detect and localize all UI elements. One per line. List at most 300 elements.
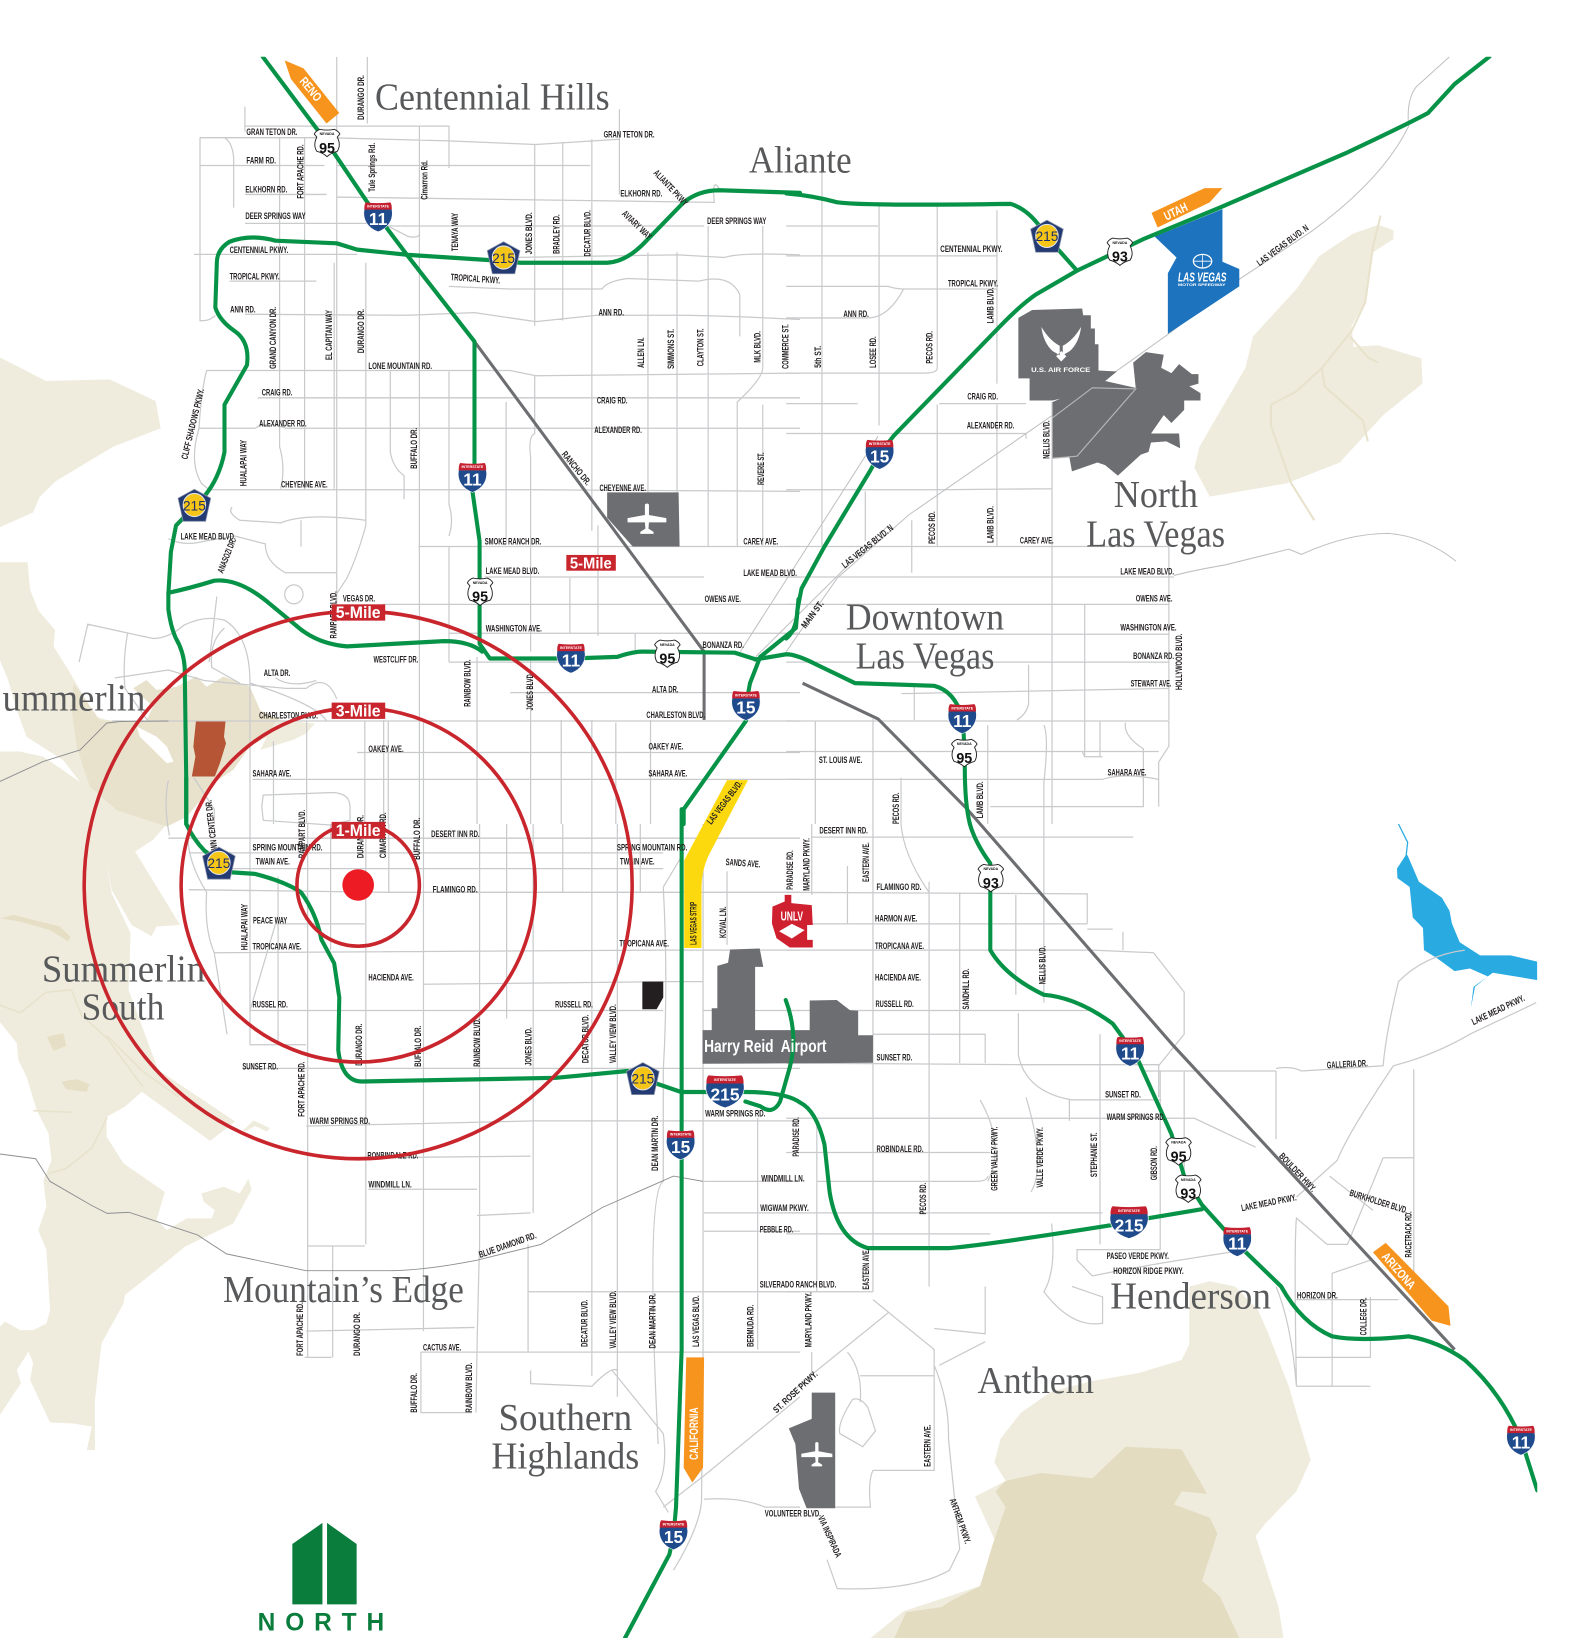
Harry Reid Airport: [703, 948, 873, 1064]
road labels: northwest quadrant: HUALAPAI WAY: [239, 439, 248, 486]
road labels: northeast quadrant: CENTENNIAL PKWY.: [940, 244, 1003, 254]
road labels: northwest quadrant: CHEYENNE AVE.: [281, 480, 328, 490]
road labels: southeast quadrant: FLAMINGO RD.: [877, 882, 921, 892]
road labels: northwest quadrant: MLK BLVD.: [753, 331, 763, 363]
shield: US 95: 95: [956, 751, 972, 767]
road labels: northwest quadrant: SIMMONS ST.: [666, 329, 676, 369]
road labels: northwest quadrant: CRAIG RD.: [262, 388, 292, 398]
road labels: southeast quadrant: HARMON AVE.: [875, 914, 917, 924]
directional arrow: Reno: RENO: [297, 74, 325, 105]
road labels: northwest quadrant: AVIARY WAY: [620, 208, 654, 242]
road labels: northeast quadrant: BONANZA RD.: [1133, 651, 1174, 661]
road labels: northwest quadrant: ANASOZI DR.: [216, 537, 238, 575]
shield: I-11: [948, 704, 976, 734]
road labels: southwest quadrant: TROPICANA AVE.: [253, 941, 302, 952]
shield: I-11: [1223, 1227, 1251, 1256]
shield: US 93: [978, 864, 1004, 892]
road labels: southwest quadrant: SANDS AVE.: [725, 857, 761, 870]
road labels: northwest quadrant: GRAND CANYON DR.: [268, 307, 278, 369]
road labels: northeast quadrant: WASHINGTON AVE.: [1120, 622, 1177, 633]
road labels: southeast quadrant: EASTERN AVE.: [861, 842, 871, 882]
shield: I-15: [865, 440, 894, 469]
road labels: southwest quadrant: HACIENDA AVE.: [368, 972, 414, 983]
shield: I-11: 11: [463, 469, 482, 490]
shield: CC 215: [203, 847, 235, 879]
road labels: southwest quadrant: DEAN MARTIN DR.: [648, 1293, 658, 1348]
road labels: northeast quadrant: LOSEE RD.: [868, 336, 878, 368]
road labels: northwest quadrant: CHARLESTON BLVD.: [259, 710, 318, 720]
shield: US 95: 95: [319, 141, 335, 157]
shield: I-11: INTERSTATE: [1510, 1428, 1532, 1432]
road labels: northwest quadrant: OAKEY AVE.: [368, 744, 404, 754]
road labels: northeast quadrant: LAS VEGAS BLVD. N: [840, 523, 895, 570]
road labels: northeast quadrant: HOLLYWOOD BLVD.: [1174, 634, 1184, 690]
road labels: northeast quadrant: ANN RD.: [843, 309, 869, 319]
road labels: northwest quadrant: BUFFALO DR.: [412, 818, 422, 860]
brown highlighted parcel: [192, 721, 226, 777]
road labels: northwest quadrant: DECATUR BLVD.: [582, 210, 592, 256]
shield: I-11: 11: [1121, 1043, 1139, 1063]
road labels: southwest quadrant: BLUE DIAMOND RD.: [478, 1230, 538, 1260]
road labels: southeast quadrant: VIA INSPIRADA: [816, 1514, 843, 1559]
road labels: northwest quadrant: BONANZA RD.: [703, 640, 744, 650]
road labels: southwest quadrant: DECATUR BLVD.: [580, 1015, 590, 1063]
shield: US 95: NEVADA: [473, 581, 488, 585]
road labels: northwest quadrant: RAMPART BLVD.: [297, 810, 307, 858]
road labels: southwest quadrant: DEAN MARTIN DR.: [650, 1116, 660, 1171]
road labels: southwest quadrant: DURANGO DR.: [352, 1312, 362, 1356]
road labels: southwest quadrant: DURANGO DR.: [354, 1024, 364, 1066]
shield: I-11: INTERSTATE: [462, 465, 484, 469]
shield: CC 215: [178, 489, 211, 521]
shield: I-11: INTERSTATE: [560, 646, 582, 650]
road labels: northwest quadrant: ALIANTE PKWY: [652, 168, 690, 208]
shield: US 95: [314, 129, 340, 157]
shield: US 95: NEVADA: [957, 742, 972, 746]
road labels: northeast quadrant: CAREY AVE.: [1020, 535, 1054, 545]
road labels: northwest quadrant: SAHARA AVE.: [253, 769, 291, 779]
road labels: southwest quadrant: RONBINDALE RD.: [367, 1151, 418, 1161]
road labels: northwest quadrant: RANCHO DR.: [560, 449, 593, 487]
road labels: northeast quadrant: NELLIS BLVD.: [1042, 420, 1051, 459]
road labels: northeast quadrant: OWENS AVE.: [1136, 594, 1172, 604]
shield: US 95: [1166, 1138, 1191, 1165]
road labels: northeast quadrant: LAKE MEAD BLVD.: [1120, 566, 1174, 576]
road labels: southeast quadrant: PECOS RD.: [918, 1183, 928, 1214]
road labels: northeast quadrant: ST. LOUIS AVE.: [819, 755, 862, 765]
shield: I-11: [364, 202, 392, 232]
road labels: northeast quadrant: TROPICAL PKWY.: [948, 278, 998, 288]
road labels: northwest quadrant: REVERE ST.: [756, 452, 766, 485]
area names: South: [82, 987, 165, 1029]
shield: CC 215: 215: [1035, 228, 1059, 244]
area names: Southern: [498, 1397, 633, 1439]
shield: I-15: 15: [671, 1137, 690, 1157]
shield: I-15: 15: [736, 697, 756, 718]
road labels: southwest quadrant: FORT APACHE RD.: [297, 1062, 307, 1117]
road labels: northwest quadrant: Tule Springs Rd.: [367, 143, 377, 192]
road labels: southwest quadrant: PEACE WAY: [253, 915, 288, 925]
road labels: northeast quadrant: SAHARA AVE.: [1108, 768, 1146, 778]
shield: I-15: INTERSTATE: [663, 1523, 685, 1527]
road labels: northwest quadrant: LAS VEGAS BLVD.: [705, 779, 744, 826]
shield: I-11: [458, 463, 487, 492]
area names: Henderson: [1110, 1276, 1271, 1318]
terrain: western mountains: [0, 562, 315, 1450]
shield: US 93: NEVADA: [1113, 241, 1128, 245]
road labels: southwest quadrant: PARADISE RD.: [791, 1117, 801, 1157]
area names: Aliante: [749, 140, 852, 181]
road labels: southwest quadrant: LAS VEGAS BLVD.: [691, 1295, 701, 1347]
road labels: southeast quadrant: RACETRACK RD.: [1404, 1211, 1414, 1258]
road labels: northeast quadrant: ALEXANDER RD.: [967, 420, 1014, 430]
shield: I-11: INTERSTATE: [367, 205, 390, 209]
shield: US 93: NEVADA: [983, 867, 999, 871]
road labels: northeast quadrant: LAS VEGAS BLVD. N: [1255, 223, 1311, 268]
road labels: southwest quadrant: JONES BLVD.: [524, 1027, 534, 1066]
road labels: southwest quadrant: BERMUDA RD.: [746, 1305, 756, 1347]
road labels: southwest quadrant: WARM SPRINGS RD.: [705, 1109, 765, 1119]
road labels: northeast quadrant: LAMB BLVD.: [975, 781, 985, 818]
road labels: northwest quadrant: ALEXANDER RD.: [594, 425, 642, 435]
small black parcel: [642, 982, 663, 1009]
road labels: northwest quadrant: CHEYENNE AVE.: [599, 483, 646, 493]
area names: Las Vegas: [1086, 514, 1225, 556]
road labels: northwest quadrant: TENAYA WAY: [450, 212, 460, 251]
road labels: southwest quadrant: RUSSEL RD.: [253, 999, 288, 1009]
directional arrow: Reno: [285, 60, 339, 123]
road labels: southeast quadrant: HORIZON RIDGE PKWY.: [1113, 1266, 1184, 1276]
road labels: southeast quadrant: STEPHANIE ST.: [1089, 1132, 1099, 1177]
area names: Summerlin: [42, 949, 205, 991]
road labels: northwest quadrant: ALTA DR.: [264, 668, 290, 678]
road labels: northwest quadrant: CENTENNIAL PKWY.: [230, 245, 288, 255]
road labels: southeast quadrant: EASTERN AVE.: [861, 1249, 871, 1290]
road labels: northwest quadrant: CLAYTON ST.: [696, 328, 706, 366]
road labels: southeast quadrant: LAKE MEAD PKWY.: [1240, 1192, 1297, 1213]
Las Vegas Motor Speedway: MOTOR SPEEDWAY: [1178, 283, 1226, 287]
road labels: northwest quadrant: TOWN CENTER DR.: [204, 799, 220, 859]
road labels: northwest quadrant: GRAN TETON DR.: [604, 130, 655, 140]
shield: US 95: NEVADA: [660, 643, 675, 647]
road labels: northwest quadrant: DURANGO DR.: [356, 75, 366, 120]
shield: CC 215: [1031, 220, 1063, 252]
road labels: southeast quadrant: SANDHILL RD.: [961, 969, 971, 1010]
directional arrow: California: CALIFORNIA: [687, 1407, 701, 1460]
road labels: northwest quadrant: CHARLESTON BLVD.: [646, 710, 705, 720]
road labels: southwest quadrant: SUNSET RD.: [242, 1061, 278, 1071]
terrain: northwest hill: [0, 357, 161, 527]
directional arrow: Utah: [1152, 188, 1222, 228]
road labels: northwest quadrant: RAINBOW BLVD.: [463, 660, 472, 707]
road labels: southwest quadrant: PARADISE RD.: [785, 850, 795, 890]
road labels: northwest quadrant: SMOKE RANCH DR.: [485, 536, 541, 546]
ring tag: 3-Mile: 3-Mile: [336, 702, 381, 720]
shield: I-11: INTERSTATE: [1119, 1039, 1142, 1043]
road labels: southwest quadrant: WINDMILL LN.: [368, 1180, 412, 1190]
road labels: southwest quadrant: TWAIN AVE.: [620, 856, 655, 866]
shield: CC 215: [487, 242, 520, 274]
road labels: northwest quadrant: TROPICAL PKWY.: [450, 272, 500, 286]
road labels: northwest quadrant: EL CAPITAN WAY: [324, 310, 334, 360]
shield: US 93: [1107, 238, 1133, 266]
shield: CC 215: 215: [631, 1070, 655, 1087]
road labels: northwest quadrant: OAKEY AVE.: [648, 741, 683, 751]
shield: I-15: INTERSTATE: [735, 693, 757, 697]
road labels: northwest quadrant: BRADLEY RD.: [552, 214, 562, 254]
road labels: southeast quadrant: RUSSELL RD.: [876, 999, 914, 1009]
road labels: southwest quadrant: HUALAPAI WAY: [240, 903, 249, 950]
road labels: northwest quadrant: LAKE MEAD BLVD.: [486, 566, 539, 576]
road labels: southwest quadrant: FLAMINGO RD.: [433, 884, 478, 894]
road labels: northwest quadrant: JONES BLVD.: [525, 673, 535, 710]
road labels: southwest quadrant: FORT APACHE RD.: [295, 1302, 305, 1356]
road labels: southeast quadrant: HORIZON DR.: [1297, 1290, 1338, 1301]
road labels: northeast quadrant: [799, 223, 1311, 824]
north airport: [607, 492, 680, 547]
shield: US 95: 95: [1171, 1149, 1187, 1165]
road labels: southeast quadrant: MARYLAND PKWY.: [802, 838, 812, 891]
road labels: northwest quadrant: FARM RD.: [246, 155, 276, 165]
road labels: northwest quadrant: ALEXANDER RD.: [259, 419, 307, 429]
road labels: southwest quadrant: WIGWAM PKWY.: [760, 1203, 809, 1213]
road labels: southeast quadrant: COLLEGE DR.: [1358, 1297, 1368, 1335]
shield: CC 215: [627, 1063, 659, 1095]
road labels: northwest quadrant: LAKE MEAD BLVD.: [743, 568, 797, 578]
Nellis Air Force Base: U.S. AIR FORCE: [1031, 367, 1090, 374]
road labels: southwest quadrant: BUFFALO DR.: [409, 1373, 419, 1413]
shield: I-15: 15: [870, 446, 889, 467]
road labels: northwest quadrant: BUFFALO DR.: [409, 428, 419, 469]
area names: North: [1114, 475, 1198, 516]
directional arrow: California: [684, 1357, 704, 1482]
airport name: Harry Reid Airport: [704, 1036, 827, 1056]
road labels: northwest quadrant: CIMARRON RD.: [378, 812, 388, 858]
road labels: southwest quadrant: SPRING MOUNTAIN RD.: [617, 842, 687, 852]
road labels: southeast quadrant: LAKE MEAD PKWY.: [1470, 993, 1526, 1027]
road labels: southwest quadrant: SPRING MOUNTAIN RD.: [253, 842, 322, 852]
shield: I-15: [659, 1520, 688, 1550]
road labels: southeast quadrant: ROBINDALE RD.: [877, 1144, 923, 1154]
north arrow logo: NORTH: [258, 1609, 384, 1637]
UNLV campus: [772, 895, 813, 947]
road labels: northwest quadrant: Cimarron Rd.: [420, 160, 430, 200]
shield: US 95: [655, 640, 680, 668]
directional arrow: Arizona: [1373, 1243, 1451, 1326]
road labels: southwest quadrant: WINDMILL LN.: [761, 1173, 805, 1183]
subject site marker: [342, 869, 374, 901]
ring tag: 1-Mile: 1-Mile: [336, 822, 381, 840]
shield: I-215: [706, 1075, 744, 1108]
shield: I-11: 11: [369, 209, 387, 229]
road labels: northwest quadrant: OWENS AVE.: [705, 594, 741, 604]
shield: US 95: 95: [472, 590, 488, 606]
area names: [3, 77, 1271, 1477]
shield: US 95: [467, 578, 493, 606]
ring tag: 5-Mile: 5-Mile: [336, 604, 381, 622]
road labels: northeast quadrant: 5th ST.: [813, 346, 823, 368]
shield: I-215: 215: [1115, 1215, 1144, 1235]
road labels: northeast quadrant: LAMB BLVD.: [985, 506, 995, 543]
shield: US 93: 93: [1180, 1187, 1196, 1203]
area names: Highlands: [491, 1436, 639, 1477]
road labels: southwest quadrant: WARM SPRINGS RD.: [310, 1116, 370, 1126]
road labels: southeast quadrant: GALLERIA DR.: [1327, 1058, 1368, 1070]
road labels: southeast quadrant: SUNSET RD.: [1105, 1089, 1141, 1099]
shield: I-11: 11: [1228, 1233, 1247, 1254]
road labels: southwest quadrant: VALLEY VIEW BLVD.: [608, 1004, 618, 1063]
road labels: southwest quadrant: KOVAL LN.: [718, 907, 728, 938]
road labels: northeast quadrant: CRAIG RD.: [967, 391, 998, 401]
road labels: southeast quadrant: ANTHEM PKWY.: [948, 1497, 973, 1545]
road labels: southeast quadrant: BOULDER HWY.: [1277, 1151, 1318, 1194]
road labels: southwest quadrant: ST. ROSE PKWY.: [771, 1369, 820, 1415]
road labels: northwest quadrant: DEER SPRINGS WAY: [245, 211, 306, 221]
UNLV campus: UNLV: [781, 909, 803, 924]
road labels: southeast quadrant: GREEN VALLEY PKWY.: [990, 1127, 999, 1191]
terrain: northeast hills: [1194, 215, 1422, 520]
road labels: northeast quadrant: PECOS RD.: [891, 792, 901, 824]
shield: I-15: INTERSTATE: [670, 1133, 692, 1137]
shield: I-15: [666, 1130, 695, 1160]
shield: US 93: [1176, 1175, 1201, 1203]
road labels: northwest quadrant: DURANGO DR.: [356, 309, 366, 353]
road labels: northwest quadrant: CAREY AVE.: [743, 536, 778, 546]
road labels: northwest quadrant: ELKHORN RD.: [620, 188, 662, 199]
road labels: northwest quadrant: DEER SPRINGS WAY: [707, 216, 767, 226]
area names: Downtown: [846, 597, 1004, 639]
road labels: southeast quadrant: SUNSET RD.: [877, 1052, 912, 1063]
shield: I-11: 11: [953, 711, 972, 731]
road labels: southeast quadrant: GIBSON RD.: [1149, 1146, 1159, 1180]
road labels: southeast quadrant: EASTERN AVE.: [923, 1425, 933, 1467]
shield: I-11: [557, 644, 585, 673]
road labels: northeast quadrant: PECOS RD.: [925, 331, 935, 364]
road labels: northwest quadrant: DURANGO DR.: [355, 815, 365, 858]
road labels: southwest quadrant: DECATUR BLVD.: [580, 1300, 590, 1347]
shield: US 93: NEVADA: [1181, 1178, 1196, 1182]
shield: I-11: 11: [562, 650, 580, 670]
shield: US 95: NEVADA: [320, 132, 335, 136]
road labels: northeast quadrant: STEWART AVE.: [1131, 678, 1171, 688]
shield: CC 215: 215: [183, 497, 206, 513]
Las Vegas Motor Speedway: [1155, 209, 1239, 334]
area names: ummerlin: [3, 678, 146, 720]
shield: I-11: [1507, 1426, 1535, 1455]
road labels: northwest quadrant: RAMPART BLVD.: [329, 591, 339, 638]
shield: CC 215: 215: [207, 855, 231, 871]
north arrow logo: [258, 1523, 384, 1637]
road labels: northwest quadrant: TROPICAL PKWY.: [230, 271, 280, 282]
road labels: northwest quadrant: SAHARA AVE.: [648, 769, 687, 779]
directional arrow: Arizona: ARIZONA: [1379, 1250, 1418, 1292]
road labels: southwest quadrant: RAINBOW BLVD.: [472, 1018, 482, 1067]
road labels: northeast quadrant: PECOS RD.: [927, 511, 937, 544]
Henderson airport: [789, 1393, 835, 1508]
road labels: southeast quadrant: NELLIS BLVD.: [1038, 946, 1047, 984]
shield: I-11: 11: [1512, 1432, 1530, 1452]
shield: I-11: [1116, 1037, 1144, 1066]
ring tag: 5-Mile north: 5-Mile: [570, 555, 612, 573]
road labels: northwest quadrant: ALLEN LN.: [636, 337, 646, 368]
road labels: northwest quadrant: CRAIG RD.: [597, 395, 628, 406]
road labels: northwest quadrant: FORT APACHE RD.: [296, 145, 306, 199]
road labels: southwest quadrant: RAINBOW BLVD.: [464, 1363, 474, 1413]
road labels: southeast quadrant: TROPICANA AVE.: [875, 941, 924, 951]
shield: US 95: NEVADA: [1171, 1140, 1186, 1145]
road labels: southeast quadrant: PASEO VERDE PKWY.: [1107, 1251, 1169, 1261]
road labels: southwest quadrant: [240, 829, 836, 1519]
road labels: southwest quadrant: BUFFALO DR.: [413, 1026, 423, 1067]
shield: I-215: INTERSTATE: [1118, 1209, 1141, 1213]
shield: I-215: 215: [711, 1084, 740, 1104]
road labels: northwest quadrant: CLIFF SHADOWS PKWY.: [180, 387, 206, 460]
area names: Anthem: [978, 1361, 1094, 1402]
road labels: southwest quadrant: DESERT INN RD.: [431, 829, 480, 839]
terrain: southern mountains: [868, 1281, 1311, 1640]
shield: I-11: INTERSTATE: [1226, 1229, 1249, 1233]
area names: Las Vegas: [856, 636, 994, 678]
Nellis Air Force Base: [1018, 308, 1201, 476]
Las Vegas Strip highlight: [684, 780, 748, 948]
shield: I-15: 15: [664, 1527, 683, 1547]
road labels: southeast quadrant: BURKHOLDER BLVD.: [1348, 1188, 1409, 1216]
road labels: northwest quadrant: JONES BLVD.: [524, 212, 534, 254]
Las Vegas Motor Speedway: LAS VEGAS: [1178, 271, 1227, 285]
road labels: northwest quadrant: LAKE MEAD BLVD.: [181, 532, 236, 542]
area names: Mountain’s Edge: [223, 1270, 464, 1311]
radius rings around subject site: [84, 611, 632, 1159]
road labels: southwest quadrant: PEBBLE RD.: [760, 1224, 793, 1234]
road labels: northwest quadrant: VEGAS DR.: [343, 594, 375, 604]
road labels: southwest quadrant: VOLUNTEER BLVD.: [765, 1509, 821, 1519]
Rancho Drive and Boulder Highway: [474, 342, 1455, 1350]
road labels: southeast quadrant: WARM SPRINGS RD.: [1107, 1112, 1165, 1122]
road labels: southeast quadrant: DESERT INN RD.: [819, 825, 868, 835]
road labels: southwest quadrant: TROPICANA AVE.: [619, 938, 669, 948]
road labels: southwest quadrant: SILVERADO RANCH BLVD.: [760, 1279, 836, 1290]
shield: I-215: [1110, 1206, 1148, 1239]
road labels: northwest quadrant: [180, 75, 797, 860]
shield: US 95: 95: [659, 652, 675, 668]
road labels: southeast quadrant: [802, 825, 1526, 1559]
road labels: northwest quadrant: GRAN TETON DR.: [246, 127, 297, 137]
shield: US 95: [952, 739, 977, 767]
shield: I-15: [732, 691, 760, 720]
road labels: northeast quadrant: MAIN ST.: [799, 599, 826, 630]
road labels: southwest quadrant: LAS VEGAS STRIP: [689, 902, 698, 945]
road labels: northwest quadrant: WASHINGTON AVE.: [486, 624, 542, 634]
road labels: southwest quadrant: CACTUS AVE.: [423, 1342, 461, 1353]
road labels: southeast quadrant: HACIENDA AVE.: [875, 972, 921, 983]
directional arrow: Utah: UTAH: [1162, 200, 1190, 223]
shield: CC 215: 215: [492, 250, 515, 266]
shield: US 93: 93: [983, 876, 999, 892]
shield: I-11: INTERSTATE: [951, 706, 974, 710]
road labels: northwest quadrant: ELKHORN RD.: [245, 184, 287, 194]
road labels: southeast quadrant: VALLE VERDE PKWY.: [1035, 1127, 1045, 1188]
road labels: southwest quadrant: RUSSELL RD.: [555, 999, 593, 1009]
road labels: northwest quadrant: COMMERCE ST.: [780, 324, 790, 369]
road labels: southeast quadrant: MARYLAND PKWY.: [804, 1292, 814, 1347]
road labels: northeast quadrant: LAMB BLVD.: [985, 287, 995, 323]
road labels: northwest quadrant: ANN RD.: [598, 307, 624, 317]
lake: [1397, 824, 1537, 1008]
shield: I-15: INTERSTATE: [869, 442, 891, 446]
shield: I-215: INTERSTATE: [714, 1078, 736, 1082]
road labels: northwest quadrant: WESTCLIFF DR.: [373, 655, 418, 665]
road labels: northwest quadrant: ANN RD.: [230, 305, 256, 315]
